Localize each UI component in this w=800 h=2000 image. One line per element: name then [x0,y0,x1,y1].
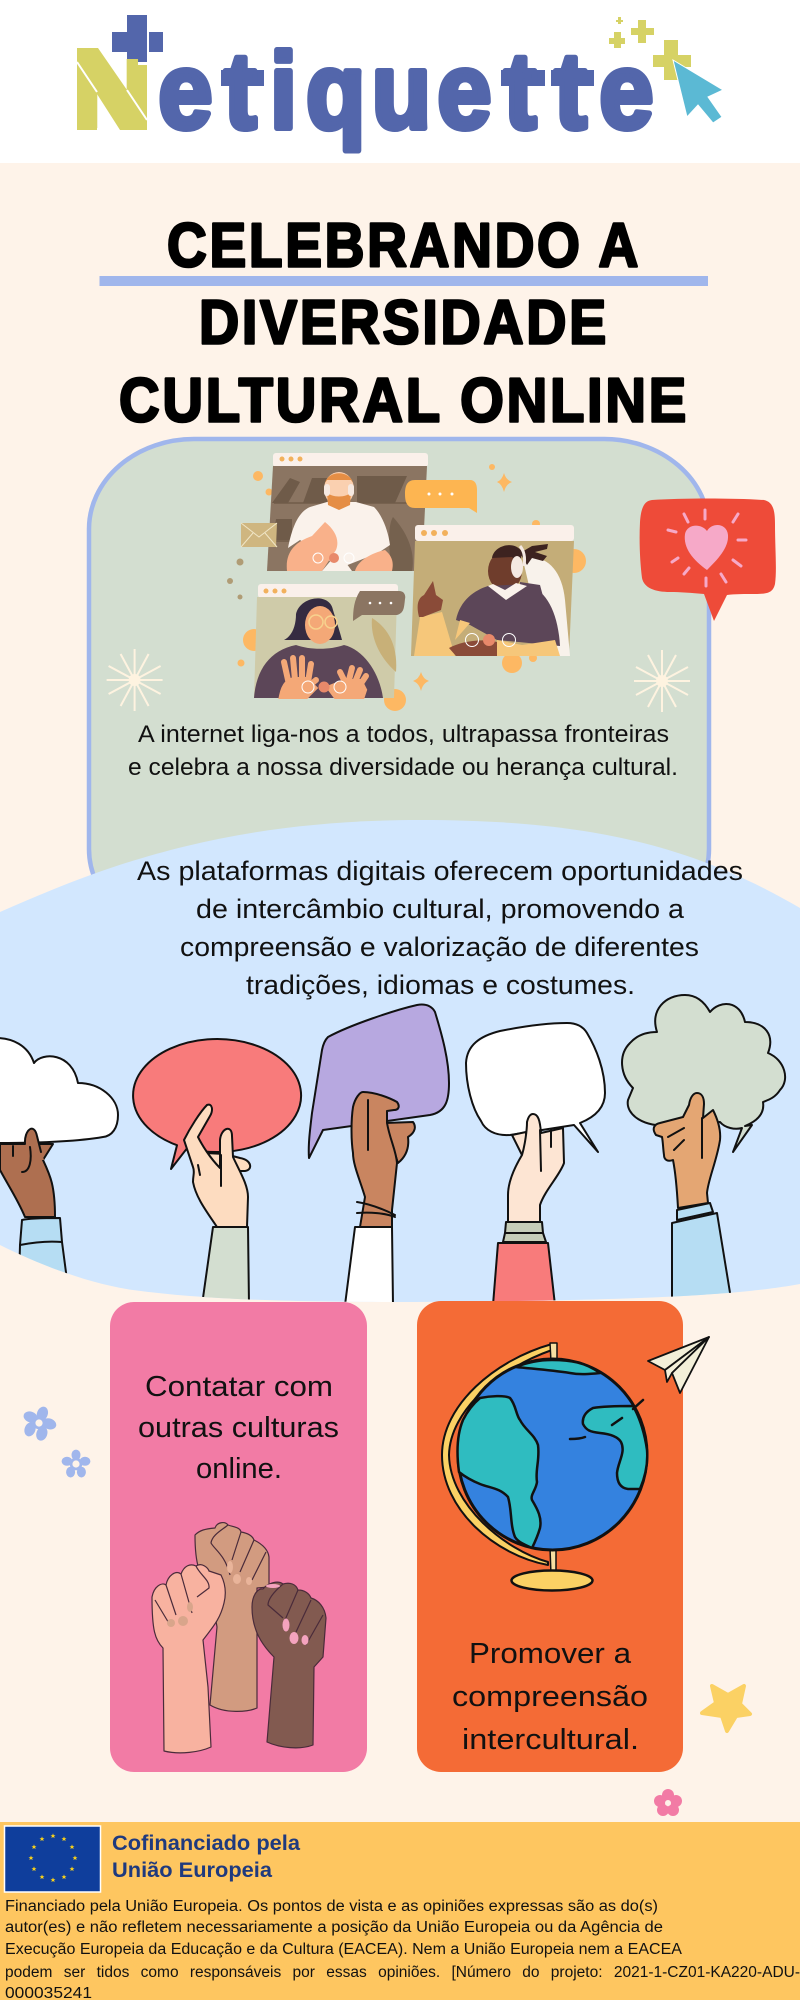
window: woman with glasses [254,584,398,698]
bubble: orange chat [405,480,477,513]
hand 3 with purple bubble [309,1005,449,1305]
text line: intercultural. [462,1724,639,1756]
text line: compreensão e valorização de diferentes [180,932,699,962]
text line: autor(es) e não refletem necessariamente a posição da União Europeia ou da Agência de [5,1919,663,1936]
text line: tradições, idiomas e costumes. [246,970,635,1000]
text line: União Europeia [112,1859,272,1882]
icon: pink flower [654,1789,682,1816]
text: orange card copy [452,1638,648,1756]
logo letters: etiquette [158,30,653,151]
text: blue panel copy [137,856,743,1000]
text line: e celebra a nossa diversidade ou herança cultural. [128,754,678,781]
hand 4 with white bubble [466,1023,605,1305]
text line: de intercâmbio cultural, promovendo a [196,894,685,924]
illustration: raised hands with speech bubbles [0,995,785,1305]
icon: blue flower small [62,1450,90,1478]
text line: A internet liga-nos a todos, ultrapassa fronteiras [138,721,669,748]
continents [458,1360,647,1548]
hand 2 with red round bubble [133,1039,301,1305]
globe base [512,1570,592,1590]
EU flag [4,1826,100,1892]
illustration: three raised fists [152,1523,326,1753]
text line: Promover a [469,1638,632,1670]
logo plus above the N [112,15,163,62]
globe stand [442,1344,552,1565]
globe sphere [458,1359,647,1550]
text: green panel copy [128,721,678,781]
text line: compreensão [452,1681,648,1713]
title [119,212,689,436]
window: person with dreadlocks [411,525,574,656]
illustration: video call windows [227,453,586,711]
panel: green video-call panel [89,439,709,939]
icon: yellow star [702,1686,750,1731]
icon: cursor arrow [673,60,723,123]
bubble: brown chat [353,591,405,621]
icon: envelope [241,523,277,547]
logo yellow plus signs [609,17,691,80]
title line 3: CULTURAL ONLINE [119,366,689,436]
icon: paper plane [648,1337,709,1393]
header: white logo band [0,0,800,163]
card: pink [110,1302,367,1772]
footer band [0,1822,800,2000]
window: man with headphones [267,453,428,571]
text line: Financiado pela União Europeia. Os pontos de vista e as opiniões expressas são as do(s) [5,1898,658,1915]
card: orange [417,1301,683,1772]
title underline [100,276,708,286]
text: pink card copy [138,1371,339,1485]
hand 1 with white cloud [0,1038,118,1280]
bubble: heart [640,498,776,621]
text line: Execução Europeia da Educação e da Cultura (EACEA). Nem a União Europeia nem a EACEA [5,1941,683,1958]
logo letter N: N [80,38,144,150]
icon: right sunburst [634,650,690,712]
logo plus gap [147,32,149,52]
logo letter bars [221,70,594,86]
title line 1: CELEBRANDO A [167,212,641,280]
text line: Contatar com [145,1371,333,1403]
hand 5 with green cloud [622,995,785,1305]
icon: blue flower large [17,1401,61,1444]
logo: Netiquette [77,15,723,151]
decorative orange dots [227,464,586,711]
panel: blue curved background [0,820,800,1302]
icon: left sunburst [107,649,163,711]
text line: online. [196,1453,282,1485]
text line: podem ser tidos como responsáveis por essas opiniões. [Número do projeto: 2021-1-CZ01-KA220-ADU- [5,1964,800,1981]
heading: Cofinanciado pela União Europeia [112,1832,300,1882]
title line 2: DIVERSIDADE [199,288,609,358]
text: disclaimer [5,1898,800,2000]
text line: outras culturas [138,1412,339,1444]
fist: dark skin [252,1582,326,1748]
fist: light skin [152,1565,225,1753]
text line: As plataformas digitais oferecem oportunidades [137,856,743,886]
text line: Cofinanciado pela [112,1832,300,1855]
fist: medium skin [195,1523,269,1711]
illustration: globe [442,1343,647,1590]
